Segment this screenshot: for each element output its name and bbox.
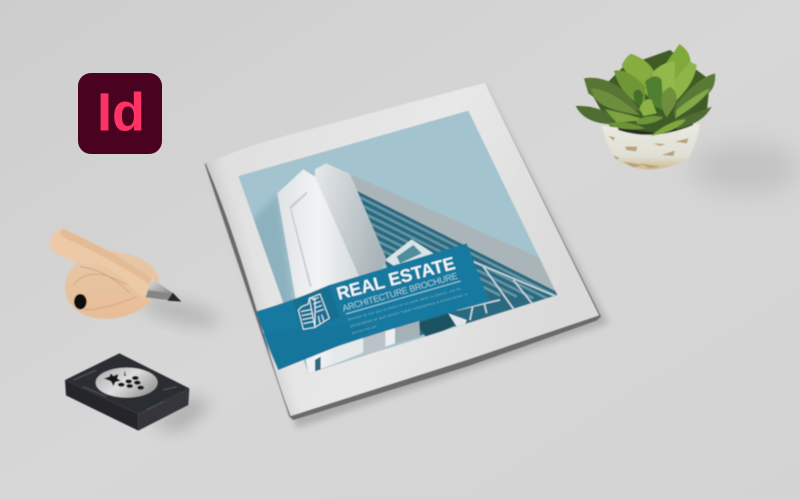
brochure cover page <box>206 83 599 416</box>
brochure subtitle: ARCHITECTURE BROCHURE <box>341 271 459 313</box>
cover photo of building <box>233 107 567 380</box>
potted succulent <box>576 44 715 169</box>
metal disc <box>96 368 158 398</box>
marble block <box>65 353 189 431</box>
icon: InDesign app logo <box>78 73 162 154</box>
leaves <box>576 44 715 136</box>
brochure <box>205 83 608 428</box>
pot <box>602 117 700 169</box>
twin towers <box>277 169 368 373</box>
pencil <box>50 228 181 302</box>
glass curtain wall <box>357 191 560 337</box>
brochure small print: Suscipit at cus quo la desto ut ius enim dolor in dolorit, cus de <box>348 287 461 322</box>
grape emblem <box>104 371 144 390</box>
peg hole <box>74 294 87 309</box>
icon: InDesign app logo: Id <box>97 82 145 142</box>
brochure small print: perspicatiae at quid dolore fugiat voluptatibus a perspicatiae in <box>350 292 468 328</box>
divider line <box>346 281 461 314</box>
plant shadow <box>690 144 800 192</box>
brochure small print: perspicatiae <box>352 324 377 335</box>
pencil holder shadow <box>139 291 221 333</box>
wooden base <box>65 252 159 319</box>
lattice windows <box>457 262 557 320</box>
teal title band <box>256 243 489 370</box>
spine shading <box>206 152 310 416</box>
objects: wooden pencil holder and marble block <box>50 228 189 431</box>
icon: office buildings <box>298 294 329 329</box>
marble block shadow <box>150 395 212 432</box>
right wing grey edge <box>350 174 555 290</box>
brochure title: REAL ESTATE <box>335 253 458 304</box>
